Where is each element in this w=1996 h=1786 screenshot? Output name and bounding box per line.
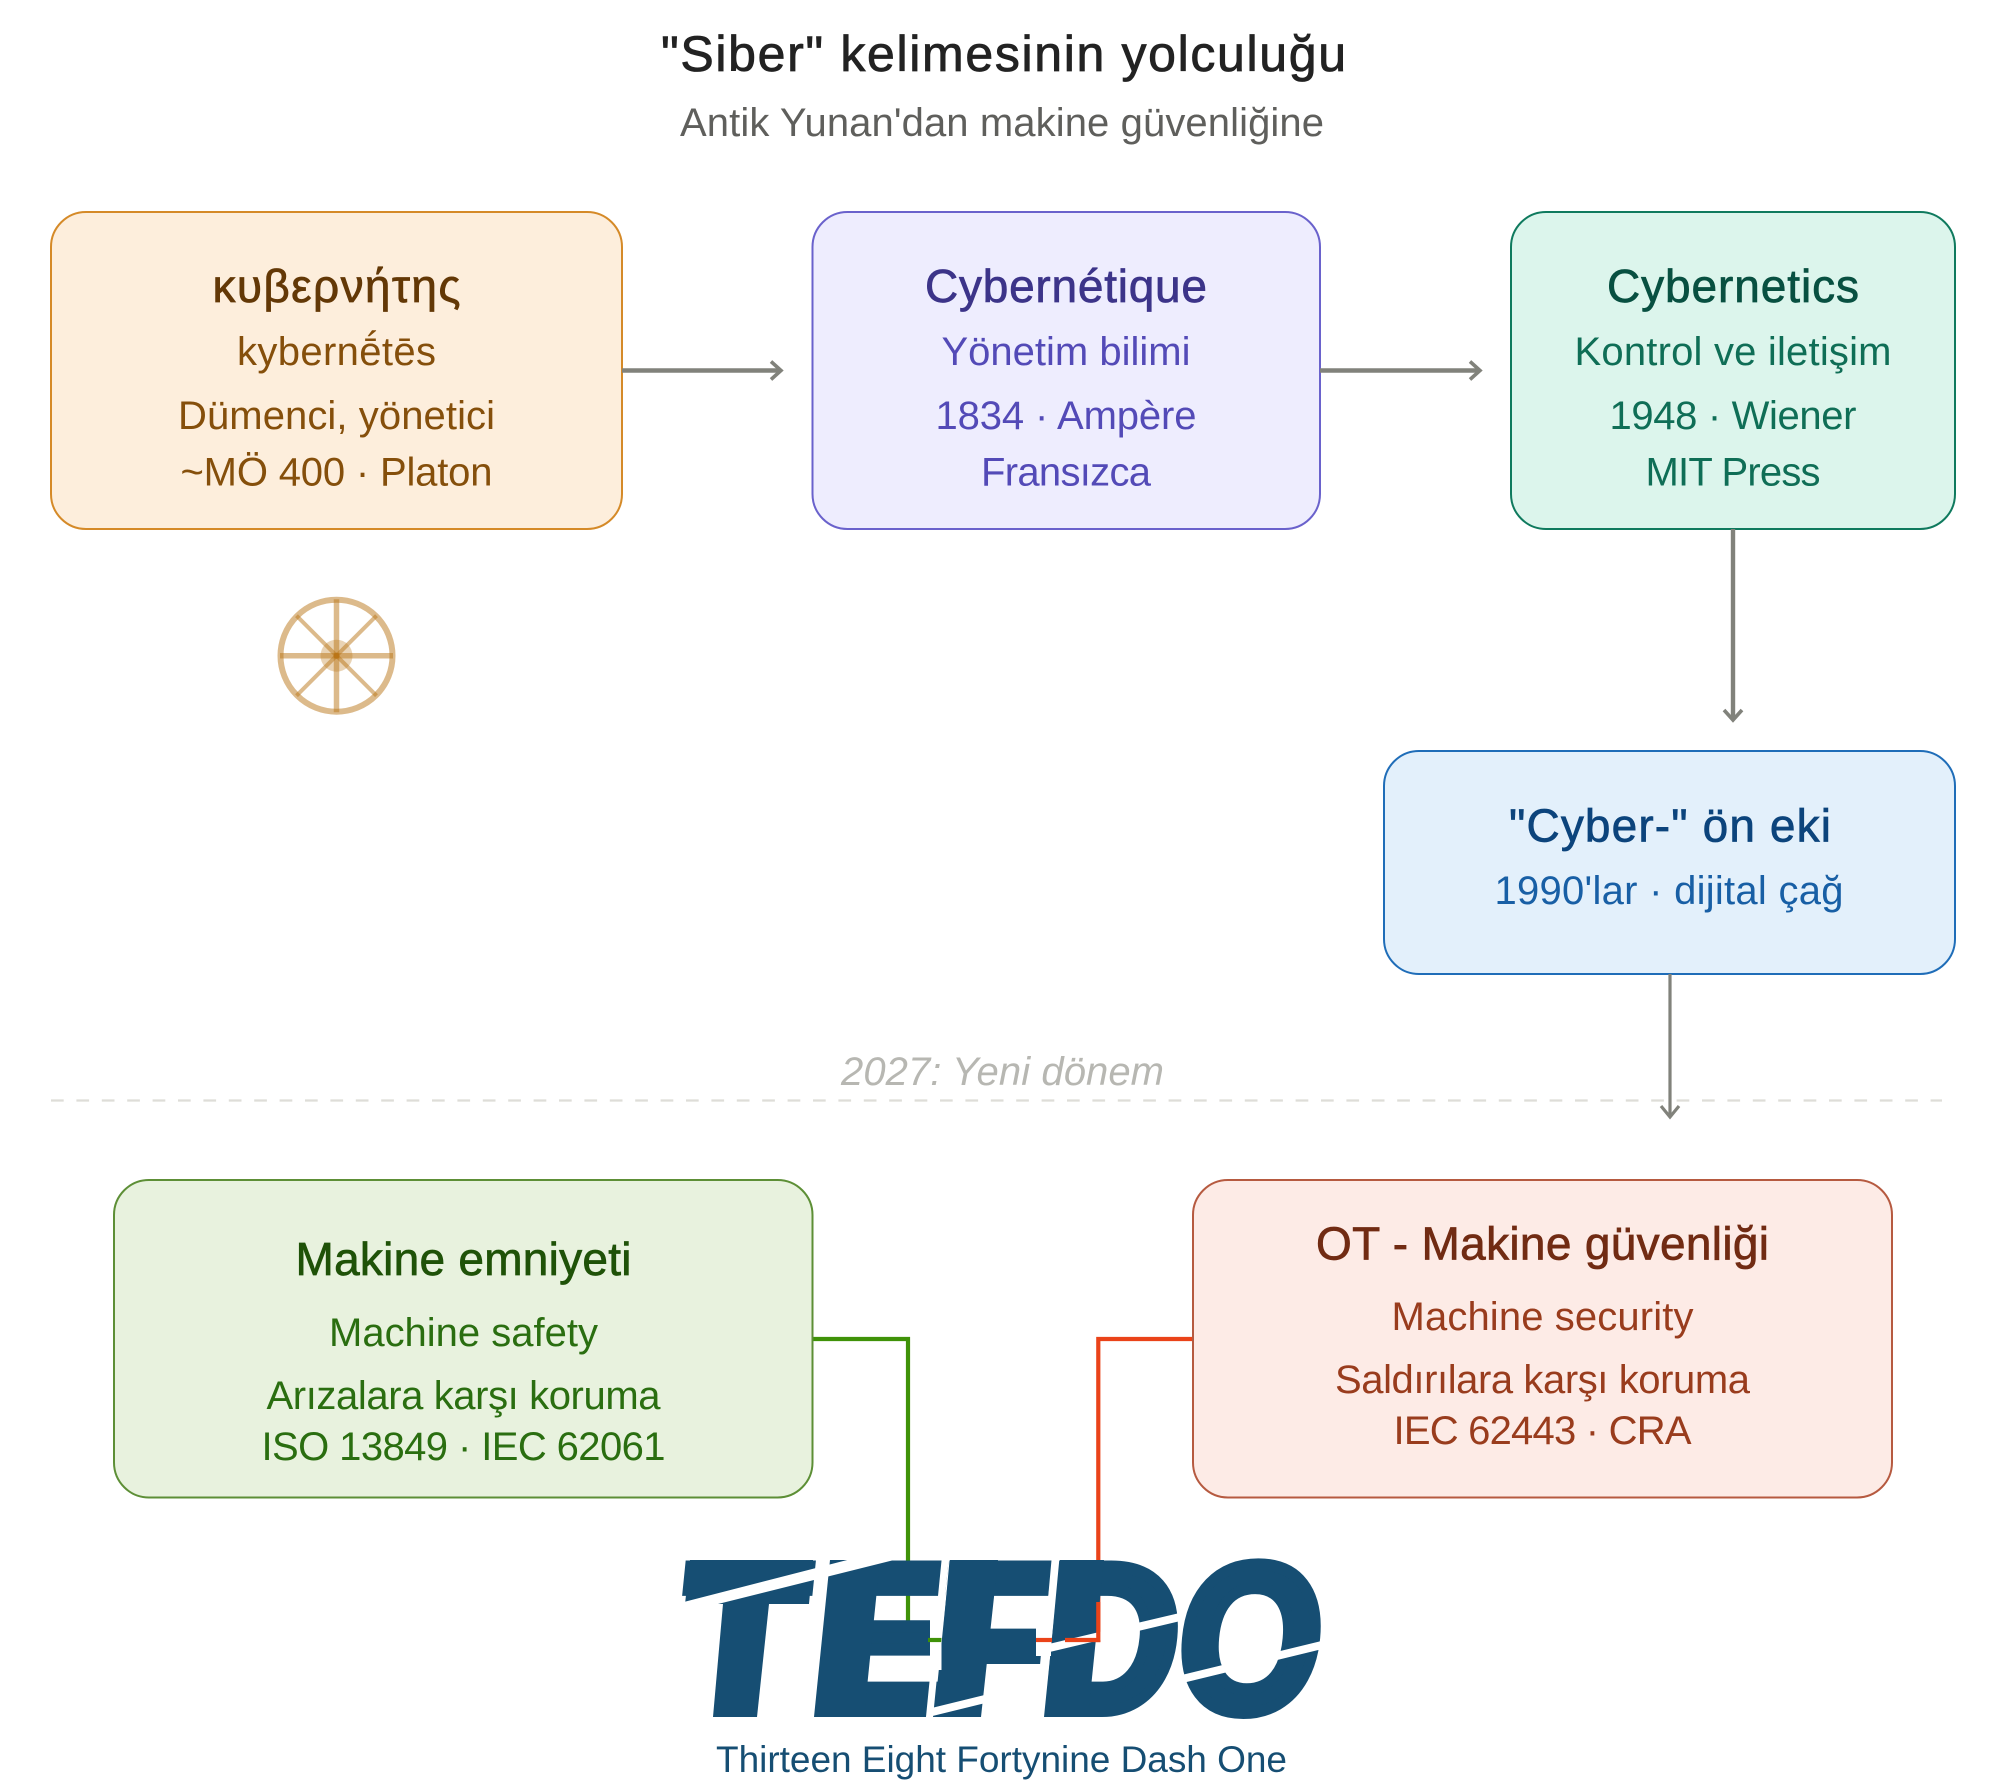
panel: cybernetics: 1948 · Wiener [1610, 394, 1856, 438]
arrow: kybernetes to cybernetique [622, 362, 781, 380]
panel: kybernetes [51, 212, 622, 529]
panel: machine safety: Arızalara karşı koruma [266, 1374, 661, 1418]
panel: cybernetique: Fransızca [981, 450, 1152, 494]
panel: machine security: IEC 62443 · CRA [1394, 1409, 1692, 1453]
panel: machine security: OT - Makine güvenliği [1316, 1218, 1769, 1270]
arrow: cyber prefix to new era [1661, 974, 1679, 1117]
panel: kybernetes: Dümenci, yönetici [178, 394, 495, 438]
logo: TEFDO: T [669, 1521, 816, 1756]
panel: cyber prefix [1384, 751, 1955, 974]
logo: TEFDO: O [1169, 1521, 1333, 1756]
panel: machine safety [114, 1180, 812, 1498]
subtitle: Antik Yunan'dan makine güvenliğine [680, 101, 1324, 145]
connector: security to logo [1030, 1339, 1193, 1640]
panel: cybernetics: MIT Press [1646, 450, 1820, 494]
panel: kybernetes: kybernḗtēs [237, 329, 436, 374]
connector: safety to logo [812, 1339, 1030, 1640]
panel: cybernetics [1511, 212, 1955, 529]
logo: TEFDO [669, 1521, 1333, 1756]
panel: machine safety: Makine emniyeti [296, 1233, 632, 1285]
panel: cyber prefix: 1990'lar · dijital çağ [1494, 869, 1844, 913]
arrow: cybernetics to cyber prefix [1724, 529, 1742, 720]
panel: cybernetique: Cybernétique [925, 260, 1207, 312]
panel: machine security: Saldırılara karşı koruma [1335, 1358, 1751, 1402]
logo: TEFDO: D [1034, 1522, 1191, 1756]
panel: kybernetes: κυβερνήτης [212, 260, 460, 312]
panel: cybernetique: Yönetim bilimi [942, 330, 1190, 374]
title: "Siber" kelimesinin yolculuğu [661, 26, 1346, 82]
icon: ship wheel [280, 599, 393, 712]
divider label: 2027: Yeni dönem [840, 1050, 1164, 1094]
panel: cybernetics: Kontrol ve iletişim [1574, 330, 1892, 374]
panel: machine security [1193, 1180, 1892, 1498]
panel: machine security: Machine security [1392, 1295, 1694, 1339]
panel: machine safety: ISO 13849 · IEC 62061 [262, 1425, 666, 1469]
panel: cybernetique: 1834 · Ampère [936, 394, 1196, 438]
panel: kybernetes: ~MÖ 400 · Platon [180, 450, 492, 494]
panel: cybernetics: Cybernetics [1607, 260, 1859, 312]
logo tagline: Thirteen Eight Fortynine Dash One [716, 1739, 1287, 1780]
logo: TEFDO: F [925, 1521, 1057, 1756]
logo: TEFDO: E [804, 1522, 958, 1756]
arrow: cybernetique to cybernetics [1320, 362, 1480, 380]
panel: cyber prefix: "Cyber-" ön eki [1509, 800, 1831, 852]
panel: machine safety: Machine safety [329, 1311, 598, 1355]
panel: cybernetique [812, 212, 1320, 529]
